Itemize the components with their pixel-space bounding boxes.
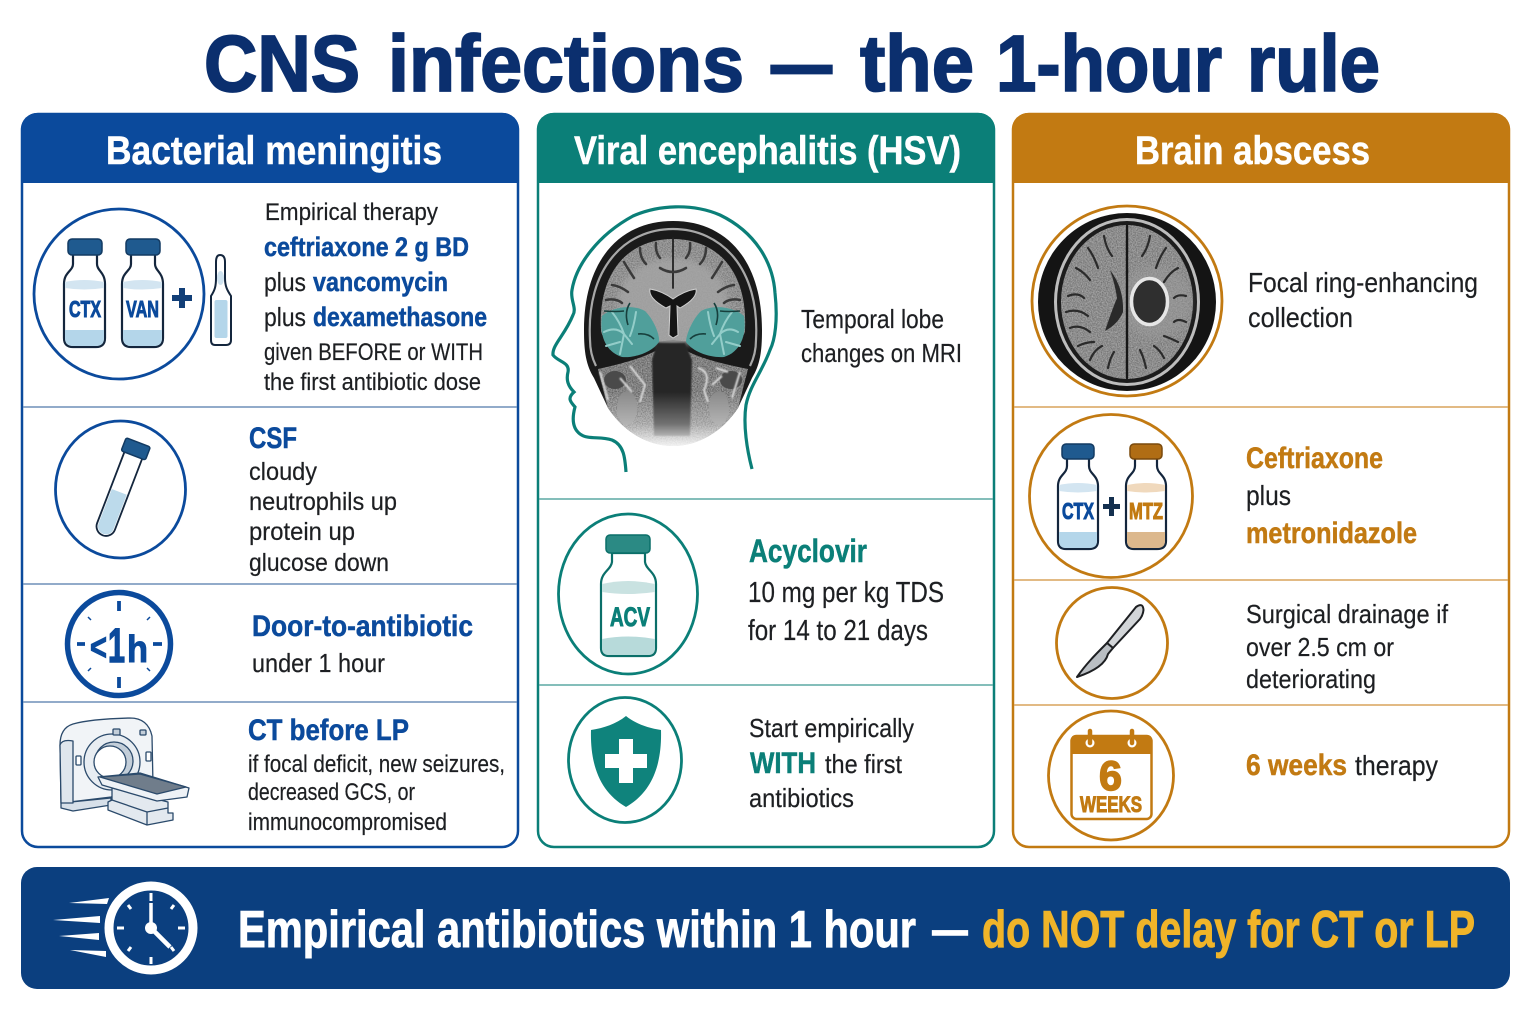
text: ceftriaxone plus metronidazole: metronidazole [1246,517,1417,550]
title: rule [1247,19,1380,108]
icon: 6 weeks calendar [1048,711,1174,840]
text: CT before LP: immunocompromised [248,809,447,836]
text: CSF findings: CSF [249,422,297,455]
text: door-to-antibiotic: Door-to-antibiotic [252,610,473,643]
text: temporal lobe changes: changes on MRI [801,338,962,368]
header: viral encephalitis [537,113,995,183]
temporal lobes highlighted [601,303,745,357]
text: focal ring-enhancing collection [1248,267,1478,333]
icon: under 1 hour clock: 1 [108,620,125,673]
icon: CT scanner [60,718,189,825]
text: empirical therapy: plus [264,302,306,332]
vial: VAN [122,239,163,347]
text: ceftriaxone plus metronidazole: plus [1246,480,1291,511]
text: empirical therapy: given BEFORE or WITH [264,339,483,366]
icon: plus [172,288,192,308]
text: focal ring-enhancing collection: Focal ring-enhancing [1248,267,1478,298]
text: empirical therapy [264,199,487,396]
text: surgical drainage: over 2.5 cm or [1246,632,1394,662]
icon: under 1 hour clock [68,592,170,696]
text: empirical therapy: plus [264,267,306,297]
text: CSF findings: neutrophils up [249,488,397,516]
text: start empirically: WITH [750,747,816,780]
text: door-to-antibiotic [252,610,473,678]
text: empirical therapy: the first antibiotic dose [264,369,481,396]
icon: under 1 hour clock: < [90,627,107,669]
title: CNS [204,19,360,108]
head outline [553,207,776,472]
header: bacterial meningitis [21,113,519,183]
text: focal ring-enhancing collection: collection [1248,302,1353,333]
text: surgical drainage: deteriorating [1246,664,1376,694]
image: axial MRI with ring-enhancing lesion [1032,206,1222,396]
text: empirical therapy: Empirical therapy [265,199,438,226]
text: start empirically [749,713,914,813]
text: CT before LP: CT before LP [248,714,409,747]
text: 6 weeks therapy: therapy [1355,750,1438,781]
text: CSF findings: protein up [249,518,355,546]
text: ceftriaxone plus metronidazole [1246,442,1417,550]
text: CT before LP: if focal deficit, new seizures, [248,751,505,778]
header: bacterial meningitis: Bacterial meningitis [106,129,442,173]
icon: CTX and VAN vials plus ampoule [34,209,231,379]
image: coronal MRI in head outline [553,207,776,472]
title: infections [388,19,744,108]
text: CSF findings [249,422,397,577]
text: acyclovir dose [748,533,944,647]
panel: brain abscess [1012,113,1510,847]
icon: CSF test tube [56,421,186,558]
text: temporal lobe changes: Temporal lobe [801,304,944,334]
text: start empirically: antibiotics [749,783,854,813]
text: 6 weeks therapy: 6 weeks [1246,749,1347,782]
vial: MTZ: MTZ [1129,498,1163,524]
text: empirical therapy: dexamethasone [313,302,487,332]
text: banner message: — [932,901,968,959]
text: acyclovir dose: for 14 to 21 days [748,615,928,647]
vial: CTX: CTX [1062,498,1094,524]
banner: 1 hour rule [21,867,1510,989]
text: surgical drainage [1246,599,1449,694]
icon: shield with cross [568,698,682,822]
text: door-to-antibiotic: under 1 hour [252,648,385,678]
vial: MTZ [1126,444,1166,549]
text: temporal lobe changes [801,304,962,368]
title [204,19,1380,108]
text: empirical therapy: vancomycin [313,267,448,297]
text: ceftriaxone plus metronidazole: Ceftriaxone [1246,442,1383,475]
panel: viral encephalitis [537,113,995,847]
ventricles [650,289,696,338]
text: acyclovir dose: 10 mg per kg TDS [748,577,944,609]
text: CT before LP: decreased GCS, or [248,779,415,806]
header: brain abscess: Brain abscess [1135,129,1370,173]
ampoule [211,255,231,345]
title: — [771,19,832,108]
text: acyclovir dose: Acyclovir [749,533,867,569]
icon: ACV vial [558,514,698,674]
title: the [860,19,974,108]
vial: VAN: VAN [126,296,159,322]
text: surgical drainage: Surgical drainage if [1246,599,1449,629]
text: banner message [238,901,1475,959]
header: viral encephalitis: Viral encephalitis (HSV) [574,129,961,173]
text: start empirically: Start empirically [749,713,914,743]
text: CT before LP [248,714,505,836]
vial: CTX: CTX [69,296,101,322]
icon: CTX and MTZ vials [1030,414,1192,578]
text: CSF findings: cloudy [249,458,317,486]
text: empirical therapy: ceftriaxone 2 g BD [264,232,469,262]
text: banner message: Empirical antibiotics within 1 hour [238,901,916,959]
vial: CTX [64,239,105,347]
icon: 6 weeks calendar: 6 [1099,752,1122,799]
icon: 6 weeks calendar: WEEKS [1080,792,1142,817]
title: 1-hour [996,19,1222,108]
text: start empirically: the first [825,749,903,779]
text: CSF findings: glucose down [249,549,389,577]
icon: plus [1103,497,1120,516]
text: 6 weeks therapy [1246,749,1438,782]
panel: bacterial meningitis [21,113,519,847]
header: brain abscess [1012,113,1510,183]
icon: scalpel [1056,588,1168,698]
icon: fast clock [53,886,193,970]
skull base and neck muscles [598,350,748,446]
vial: CTX [1058,444,1098,549]
icon: ACV vial: ACV [610,602,650,632]
icon: under 1 hour clock: h [127,629,148,671]
